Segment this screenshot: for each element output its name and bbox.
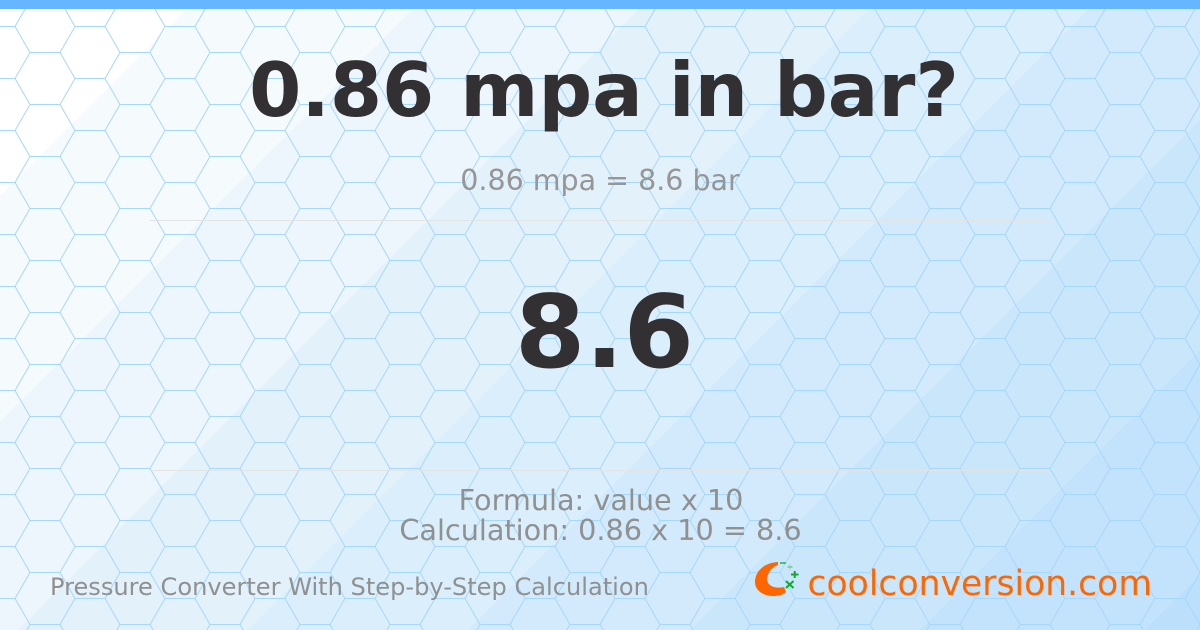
formula text block: Calculation: 0.86 x 10 = 8.6	[399, 513, 802, 547]
divider bottom	[150, 470, 1050, 471]
formula text block	[399, 483, 802, 547]
divider top	[150, 220, 1050, 221]
title: 0.86 mpa in bar?	[249, 46, 959, 134]
formula text block: Formula: value x 10	[459, 483, 743, 517]
subtitle: conversion result: 0.86 mpa = 8.6 bar	[460, 164, 740, 197]
icon: coolconversion logo	[755, 562, 798, 596]
top bar	[0, 0, 1200, 9]
brand name: coolconversion.com	[808, 564, 1152, 604]
footer tagline: Pressure Converter With Step-by-Step Calculation	[50, 573, 649, 601]
big result value: 8.6	[515, 273, 694, 391]
